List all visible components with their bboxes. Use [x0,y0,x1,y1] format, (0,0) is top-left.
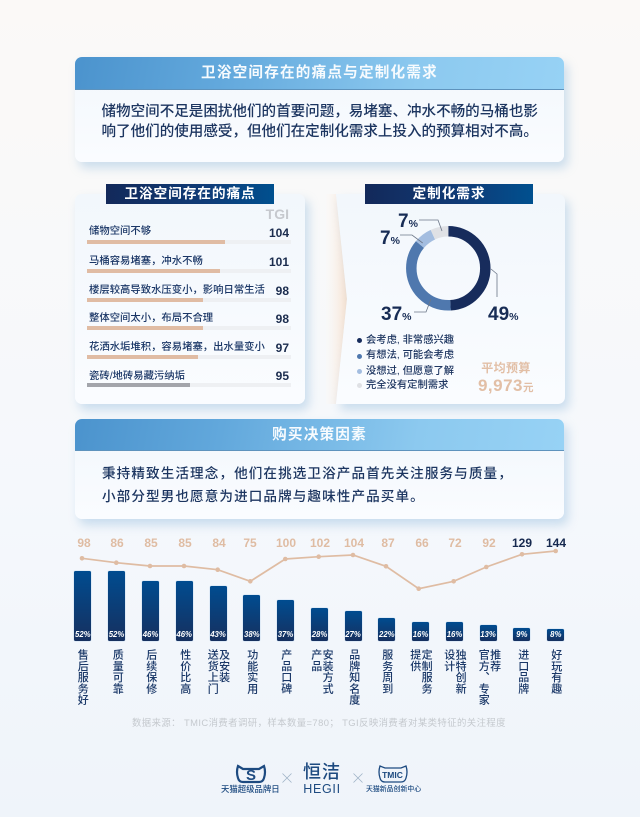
legend item 2: 有想法, 可能会考虑 [366,350,454,361]
axis label 15: 好玩有趣 [550,649,562,694]
axis label 8: 安装方式 [321,649,333,694]
axis label 8: 产品 [310,649,322,672]
bar 16 percent second: 16% [447,630,462,639]
bar 52 percent second [108,571,125,641]
logo: HEGII [303,762,341,796]
text block: summary: 响了他们的使用感受，但他们在定制化需求上投入的预算相对不高。 [102,124,538,140]
value label: 7 percent left: 7% [380,228,400,249]
row bar 2 [87,269,220,273]
bar 46 percent [142,581,159,641]
text block: purchase summary: 小部分型男也愿意为进口品牌与趣味性产品买单。 [102,489,425,504]
panel: customization demand [336,197,574,414]
heading: purchase decision factors: 购买决策因素 [272,427,367,443]
callout: average budget: 平均预算 [481,361,531,375]
row label 2: 马桶容易堵塞，冲水不畅 [89,256,203,267]
heading: pain points [106,184,274,204]
logo: Tmall super brand day: S [246,767,256,784]
arrow: chevron between panels [332,194,347,404]
TGI value 72: 72 [448,536,462,550]
row label 6: 瓷砖/地砖易藏污纳垢 [89,371,185,382]
text block: summary: 储物空间不足是困扰他们的首要问题，易堵塞、冲水不畅的马桶也影 [102,104,538,120]
TGI value 144: 144 [546,536,566,550]
TGI value 85: 85 [144,536,158,550]
row bar 4 [87,326,203,330]
donut chart [400,220,498,312]
TGI value 85 second: 85 [178,536,192,550]
bar 46 percent second [176,581,193,641]
axis label 8 [310,649,334,694]
bar 22 percent [378,618,395,641]
text block: purchase summary [102,466,513,504]
axis label 13: 官方、专家 [477,649,489,705]
bar 38 percent [243,595,260,641]
logo: Tmall super brand day [221,764,280,794]
logo: HEGII: HEGII [303,782,341,796]
legend item 1: 会考虑, 非常感兴趣 [366,334,454,346]
bar 46 percent second: 46% [176,630,192,639]
callout: average budget: 9,973元 [478,376,534,395]
axis label 12: 独特创新 [454,649,466,694]
TGI value 87: 87 [381,536,395,550]
row value 2: 101 [269,255,289,269]
axis label 12 [443,649,466,694]
bar 13 percent [480,625,496,641]
bar 43 percent: 43% [210,630,226,639]
bar 9 percent [513,628,530,641]
row value 6: 95 [276,369,289,383]
TGI value 92: 92 [482,536,496,550]
bar 38 percent: 38% [244,630,260,639]
bar 28 percent [311,608,328,641]
panel: pain points and customization summary [75,57,564,162]
heading: customization demand [365,184,533,204]
TGI value 86: 86 [110,536,124,550]
row label 1: 储物空间不够 [89,226,151,237]
axis label 13: 推荐 [489,649,501,672]
bar 52 percent: 52% [75,630,91,639]
TGI value 98: 98 [77,536,91,550]
bar 46 percent: 46% [143,630,158,639]
heading: purchase decision factors [75,419,564,451]
bar 16 percent second [446,622,463,641]
axis label 5: 送货上门 [206,649,218,694]
value label: 7 percent top: 7% [398,211,418,232]
axis label 13 [477,649,501,705]
row value 1: 104 [269,226,289,240]
axis label 10: 服务周到 [381,649,393,694]
TGI value 100: 100 [276,536,296,550]
axis label 11: 提供 [409,649,421,672]
logo: HEGII: 恒洁 [303,762,341,782]
bar 22 percent: 22% [379,630,395,639]
panel: pain point ranking [75,194,305,404]
TGI value 129: 129 [512,536,532,550]
legend item 4: 完全没有定制需求 [366,380,448,391]
row bar 1 [87,240,225,244]
row bar 5 [87,355,198,359]
legend item 3: 没想过, 但愿意了解 [366,366,454,376]
axis label 7: 产品口碑 [280,649,292,694]
row value 3: 98 [276,284,289,298]
row bar 6 [87,383,190,387]
value label: 37 percent: 37% [381,304,411,325]
logo: TMIC: 天猫新品创新中心 [366,786,421,793]
row bar 3 [87,298,203,302]
bar 28 percent: 28% [312,630,327,639]
logo: TMIC [366,765,421,793]
bar 52 percent second: 52% [109,630,124,639]
axis label 2: 质量可靠 [111,649,123,694]
TGI column label: TGI [266,206,289,222]
text block: summary [102,103,538,140]
bar 37 percent: 37% [278,630,293,639]
footnote: data source: 数据来源： TMIC消费者调研，样本数量=780； TGI反映消费者对某类特征的关注程度 [132,717,506,728]
row label 3: 楼层较高导致水压变小，影响日常生活 [89,285,265,296]
row label 4: 整体空间太小，布局不合理 [89,313,213,324]
bar 52 percent [74,571,91,641]
axis label 6: 功能实用 [246,649,258,694]
axis label 14: 进口品牌 [517,649,529,694]
bar 27 percent: 27% [345,630,361,639]
logo: Tmall super brand day: 天猫超级品牌日 [221,784,280,794]
axis label 3: 后续保修 [145,649,157,694]
logo: TMIC: TMIC [382,770,403,780]
axis label 11: 定制服务 [420,649,432,694]
multiply sign 1 [282,773,292,783]
bar 37 percent [277,600,294,641]
value label: 49 percent: 49% [488,304,518,325]
axis label 9: 品牌知名度 [348,649,360,705]
axis label 5 [206,649,230,694]
row value 5: 97 [276,341,289,355]
axis label 12: 设计 [443,649,455,672]
bar 27 percent [344,611,362,641]
TGI value 66: 66 [415,536,429,550]
chart: TGI line [80,548,558,591]
axis label 1: 售后服务好 [76,649,88,705]
bar 9 percent: 9% [516,630,527,639]
heading: pain points and customization [75,57,564,90]
callout: average budget [478,361,534,395]
bar 8 percent [547,629,564,641]
bar 13 percent: 13% [480,630,496,639]
axis label 11 [409,649,432,694]
axis label 4: 性价比高 [179,649,191,694]
TGI value 104: 104 [344,536,364,550]
bar 43 percent [210,586,226,641]
heading: pain points and customization: 卫浴空间存在的痛点与定制化需求 [201,65,438,81]
TGI value 75: 75 [243,536,257,550]
TGI value 102: 102 [310,536,330,550]
multiply sign 2 [353,773,363,783]
bar 16 percent: 16% [413,630,428,639]
axis label 5: 及安装 [218,649,230,683]
row label 5: 花洒水垢堆积，容易堵塞，出水量变小 [89,342,265,353]
heading: customization demand: 定制化需求 [413,186,485,201]
row value 4: 98 [276,312,289,326]
bar 16 percent [412,622,429,641]
bar 8 percent: 8% [550,630,561,639]
heading: pain points: 卫浴空间存在的痛点 [124,186,256,201]
TGI value 84: 84 [212,536,226,550]
panel: purchase decision factors [75,419,564,519]
text block: purchase summary: 秉持精致生活理念，他们在挑选卫浴产品首先关注服务与质量， [102,466,513,481]
